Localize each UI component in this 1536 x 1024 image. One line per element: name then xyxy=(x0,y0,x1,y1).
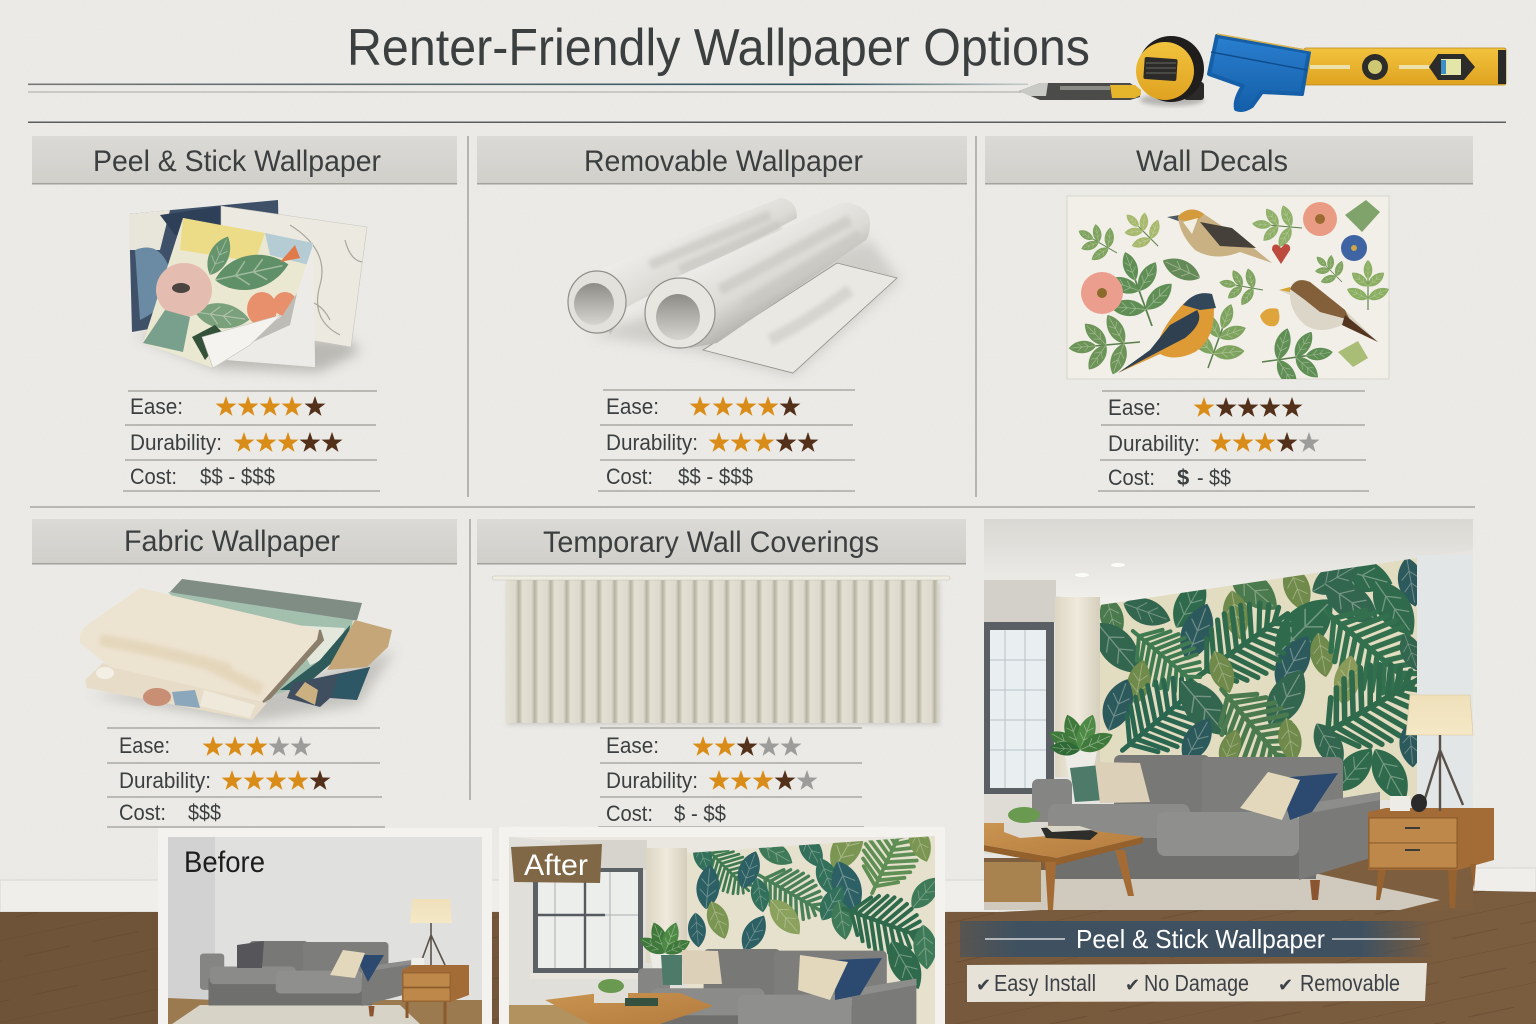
floor and rug xyxy=(984,858,1473,910)
after label badge: After xyxy=(524,849,588,882)
coffee table xyxy=(545,979,713,1024)
ratings: Cost: xyxy=(119,800,166,825)
panel: temporary wall coverings xyxy=(477,519,966,827)
sofa xyxy=(1032,755,1380,900)
ratings: Durability: xyxy=(1108,431,1200,456)
illustration: wallpaper sheets with peeled corner xyxy=(129,200,367,372)
heading: Fabric Wallpaper xyxy=(124,525,340,558)
feature strip: easy install, no damage, removable: Removable xyxy=(1300,970,1400,996)
room with wallpaper xyxy=(509,836,935,1024)
heading: Removable Wallpaper xyxy=(584,145,863,178)
ratings xyxy=(598,390,855,491)
coffee table with plant and books xyxy=(984,807,1143,910)
heading xyxy=(32,136,457,184)
ratings: $$$ xyxy=(188,800,221,825)
ratings: Cost: xyxy=(606,464,653,489)
photo frame xyxy=(499,827,945,1024)
ratings: Ease: xyxy=(606,733,659,758)
ratings: Ease: xyxy=(130,394,183,419)
banner: peel and stick wallpaper xyxy=(960,921,1432,957)
panel dividers xyxy=(30,136,1475,800)
room walls and ceiling xyxy=(984,519,1473,910)
feature strip: easy install, no damage, removable: No Damage xyxy=(1144,970,1249,996)
title: Renter-Friendly Wallpaper Options xyxy=(347,19,1090,77)
ratings: Durability: xyxy=(119,768,211,793)
ratings: Ease: xyxy=(119,733,170,758)
empty room xyxy=(168,837,482,1024)
icon: tape measure xyxy=(1136,36,1204,106)
icon: craft knife xyxy=(1019,83,1141,100)
sofa xyxy=(638,949,916,1024)
ratings: - $$ xyxy=(1197,465,1231,490)
illustration: bird and botanical decal sheet xyxy=(1066,196,1391,395)
feature strip: easy install, no damage, removable: Easy Install xyxy=(994,970,1096,996)
ratings: Ease: xyxy=(1108,395,1161,420)
ratings: $$ - $$$ xyxy=(200,464,275,489)
wood floor xyxy=(0,890,1536,1024)
panel: peel and stick wallpaper xyxy=(32,136,457,491)
title rule lines xyxy=(28,84,1506,123)
panel: wall decals xyxy=(985,136,1473,491)
feature strip: easy install, no damage, removable: ✔ xyxy=(1125,975,1140,995)
heading xyxy=(477,136,967,184)
nightstand xyxy=(1368,808,1494,908)
potted plant xyxy=(1046,712,1116,778)
ratings: Cost: xyxy=(130,464,177,489)
ratings: Durability: xyxy=(130,430,222,455)
ratings: $ - $$ xyxy=(674,801,726,826)
heading xyxy=(477,519,966,564)
icon: blue squeegee xyxy=(1209,34,1311,110)
lamp and nightstand xyxy=(402,899,469,1024)
heading xyxy=(985,136,1473,184)
sofa pillows xyxy=(1070,762,1338,820)
ratings xyxy=(1098,391,1369,491)
before label: Before xyxy=(184,846,265,879)
heading: Peel & Stick Wallpaper xyxy=(93,145,381,178)
ratings: Durability: xyxy=(606,768,698,793)
ratings: Cost: xyxy=(606,801,653,826)
feature strip: easy install, no damage, removable: ✔ xyxy=(976,975,991,995)
illustration: two rolls of wallpaper xyxy=(568,198,900,376)
illustration: pleated fabric curtain on rod xyxy=(492,576,950,725)
heading xyxy=(32,519,457,564)
panel: removable wallpaper xyxy=(477,136,967,491)
panel: living room with peel and stick wallpaper xyxy=(984,519,1494,910)
panel: after photo xyxy=(499,810,946,1024)
ratings: $ xyxy=(1177,465,1189,490)
sofa pillows xyxy=(237,941,384,982)
feature strip: easy install, no damage, removable: ✔ xyxy=(1278,975,1293,995)
heading: Temporary Wall Coverings xyxy=(543,526,879,559)
ratings xyxy=(107,728,385,827)
photo frame xyxy=(158,828,492,1024)
heading: Wall Decals xyxy=(1136,145,1288,178)
panel: fabric wallpaper xyxy=(32,519,457,827)
after label badge xyxy=(511,844,602,883)
ratings: $$ - $$$ xyxy=(678,464,753,489)
window and curtain xyxy=(984,580,1100,854)
ratings xyxy=(123,391,380,491)
ratings xyxy=(598,728,864,827)
potted plant xyxy=(637,920,693,975)
sofa xyxy=(200,941,411,1016)
feature strip: easy install, no damage, removable xyxy=(967,963,1427,1002)
baseboard xyxy=(0,868,1536,912)
ratings: Ease: xyxy=(606,394,659,419)
ratings: Cost: xyxy=(1108,465,1155,490)
table lamp xyxy=(1390,695,1473,812)
tropical leaf wallpaper xyxy=(1100,558,1417,800)
ratings: Durability: xyxy=(606,430,698,455)
banner: peel and stick wallpaper: Peel & Stick Wallpaper xyxy=(1076,924,1325,954)
icon: spirit level xyxy=(1304,48,1506,85)
sofa pillows xyxy=(661,950,882,1000)
panel: before photo xyxy=(158,828,492,1024)
illustration: folded fabric stack xyxy=(80,579,395,722)
